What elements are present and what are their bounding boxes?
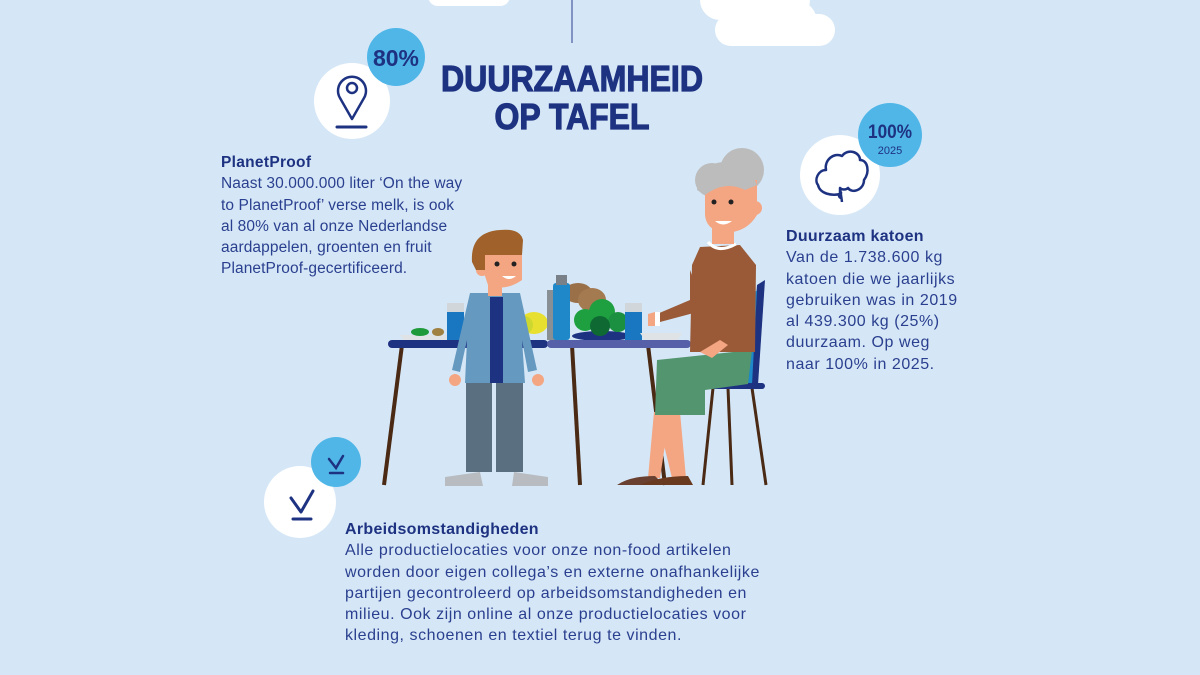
text: Duurzaam katoen: al 439.300 kg (25%) [786,313,940,330]
text: Duurzaam katoen: katoen die we jaarlijks [786,271,955,288]
text: Duurzaam katoen: Van de 1.738.600 kg [786,249,943,266]
text: Arbeidsomstandigheden: milieu. Ook zijn online al onze productielocaties voor [345,606,746,623]
text: PlanetProof: aardappelen, groenten en fruit [221,239,432,256]
text: PlanetProof: PlanetProof [221,154,311,171]
icon: cotton 100% 2025 [800,103,922,215]
text: Arbeidsomstandigheden [345,521,760,644]
text: Arbeidsomstandigheden: Alle productielocaties voor onze non-food artikelen [345,542,732,559]
text: PlanetProof [221,154,462,277]
text: PlanetProof: PlanetProof-gecertificeerd. [221,260,407,277]
text: Duurzaam katoen: naar 100% in 2025. [786,356,935,373]
icon: cotton 100% 2025: 2025 [878,145,902,157]
grandma [617,148,764,485]
text: Arbeidsomstandigheden: kleding, schoenen en textiel terug te vinden. [345,627,682,644]
boy [445,230,548,486]
icon: location pin 80%: 80% [373,45,419,71]
text: Arbeidsomstandigheden: worden door eigen collega’s en externe onafhankelijke [345,564,760,581]
text: Duurzaam katoen: gebruiken was in 2019 [786,292,958,309]
text: PlanetProof: Naast 30.000.000 liter ‘On the way [221,175,462,192]
icon: cotton 100% 2025: 100% [868,122,912,143]
table [384,340,691,485]
text: PlanetProof: to PlanetProof’ verse melk, is ook [221,197,454,214]
text: PlanetProof: al 80% van al onze Nederlandse [221,218,447,235]
table items [400,275,682,341]
text: Duurzaam katoen [786,228,958,373]
title [441,60,703,135]
chair [703,280,766,485]
text: Arbeidsomstandigheden: Arbeidsomstandigheden [345,521,539,538]
icon: location pin 80% [314,28,425,139]
text: Duurzaam katoen: Duurzaam katoen [786,228,924,245]
text: Arbeidsomstandigheden: partijen gecontroleerd op arbeidsomstandigheden en [345,585,747,602]
text: Duurzaam katoen: duurzaam. Op weg [786,334,930,351]
icon: checkmark [264,437,361,538]
